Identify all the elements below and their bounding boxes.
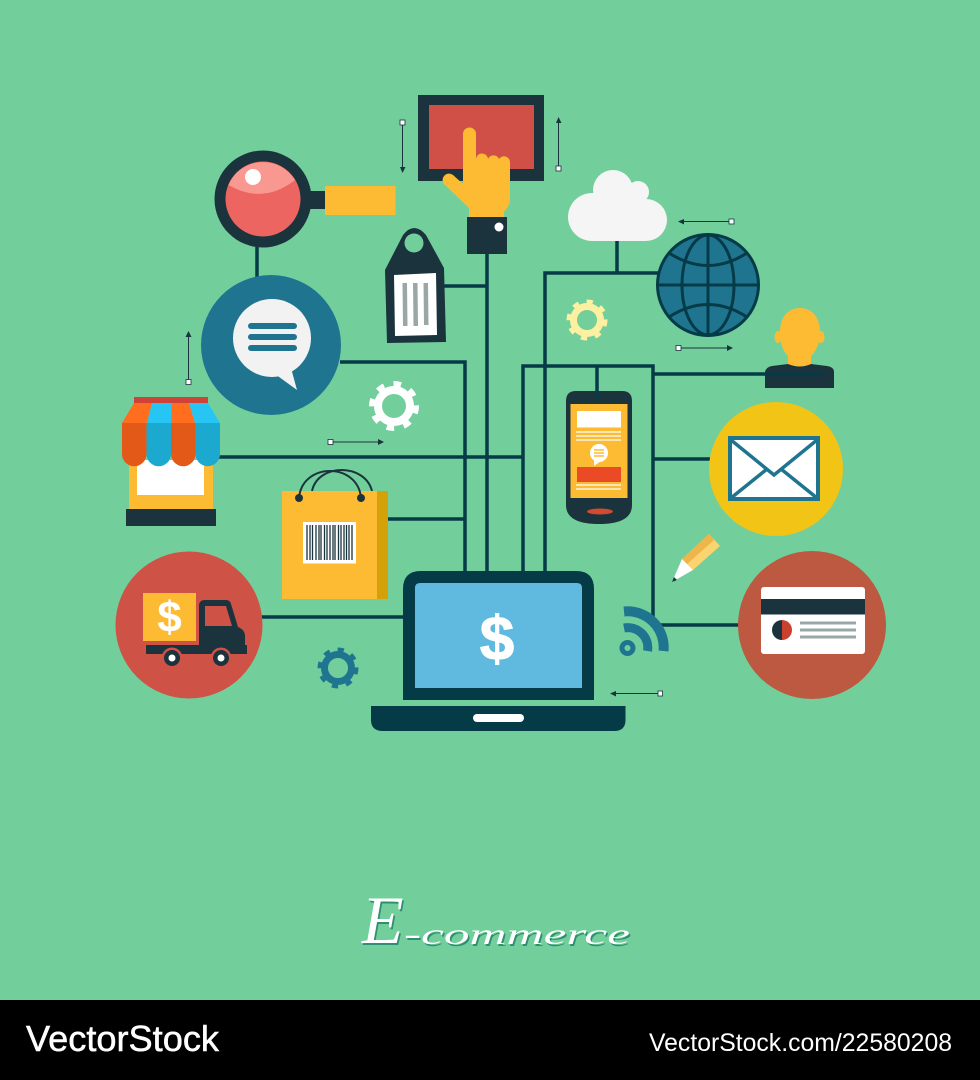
footer bar <box>0 1000 980 1080</box>
title: E-commerce <box>361 882 632 960</box>
icon: laptop: $ <box>480 605 514 674</box>
icon: delivery truck circle: $ <box>157 593 182 642</box>
icon: chat bubble circle <box>201 275 341 415</box>
icon: delivery truck circle <box>116 552 262 698</box>
icon: envelope circle <box>709 402 843 536</box>
small arrow: left beside laptop <box>610 691 662 696</box>
icon: credit card circle <box>738 551 886 699</box>
icon: smartphone <box>566 391 632 524</box>
small arrow: right below white gear <box>328 439 384 445</box>
icon: globe <box>658 234 758 336</box>
title: E-commerce: E <box>362 884 405 960</box>
footer brand name: VectorStock <box>26 1018 220 1059</box>
icon: price tag <box>385 228 446 343</box>
small arrow: up above store <box>186 331 192 384</box>
small arrow: left above globe <box>678 219 734 224</box>
connector lines network <box>218 240 790 625</box>
icon: storefront <box>122 397 220 526</box>
icon: blue gear <box>320 650 356 686</box>
title: E-commerce: -commerce <box>406 920 632 953</box>
icon: shopping bag with barcode <box>282 470 388 599</box>
icon: tablet with pointing hand <box>418 95 544 254</box>
small arrow: up right of tablet <box>556 117 562 171</box>
footer image reference: VectorStock.com/22580208 <box>649 1029 952 1057</box>
icon: white gear <box>372 384 416 428</box>
icon: cloud <box>568 170 667 241</box>
icon: pencil <box>672 534 720 582</box>
title: E-commerce: E <box>361 882 404 958</box>
small arrow: right below globe <box>676 345 733 351</box>
icon: laptop <box>371 571 626 731</box>
icon: magnifying glass <box>214 150 396 248</box>
small arrow: down beside tablet <box>400 120 406 173</box>
title: E-commerce: -commerce <box>404 918 630 951</box>
icon: wifi signal <box>622 611 664 654</box>
icon: yellow gear <box>569 302 605 338</box>
icon: person <box>765 308 834 388</box>
